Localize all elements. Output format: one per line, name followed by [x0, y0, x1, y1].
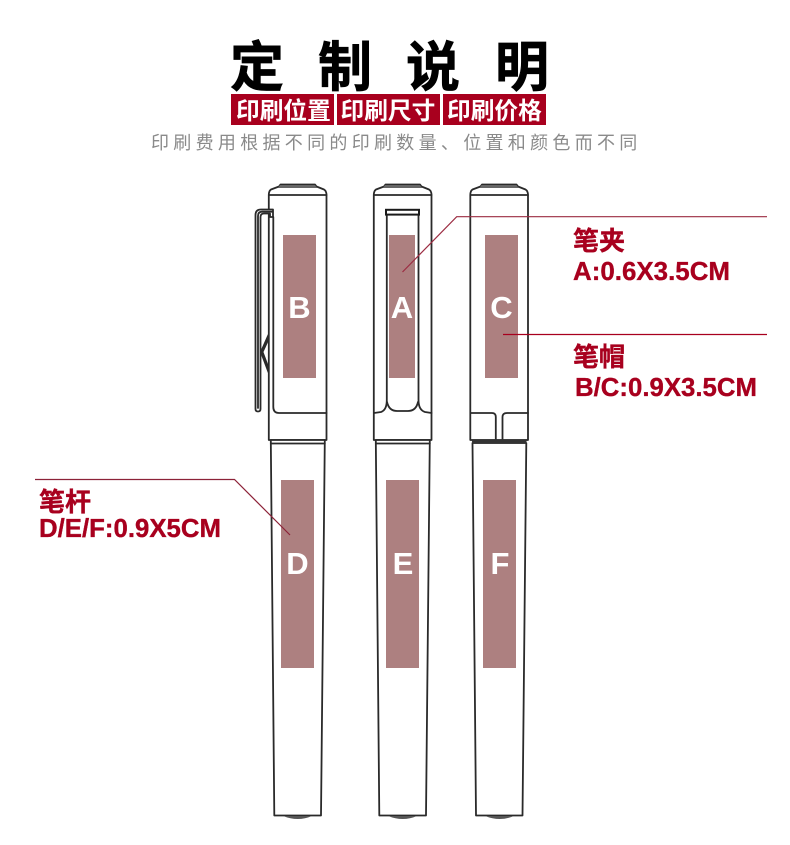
- barrel: [271, 440, 325, 816]
- label: clip: [573, 226, 730, 286]
- leader line: clip: [402, 217, 767, 272]
- barrel: [376, 440, 430, 816]
- leader line: barrel: [35, 480, 290, 535]
- title: 制: [318, 38, 372, 98]
- label: barrel: [39, 487, 221, 543]
- label: barrel: D/E/F:0.9X5CM: [39, 513, 221, 543]
- print area E: [386, 480, 419, 668]
- tag: print size: 印刷尺寸: [340, 98, 435, 125]
- letter F: F: [491, 546, 509, 581]
- pen left: with clip side view: [256, 184, 326, 819]
- label: cap: B/C:0.9X3.5CM: [575, 372, 757, 402]
- cap: [269, 184, 326, 440]
- label: cap: 笔帽: [573, 342, 625, 372]
- print area C: [485, 235, 518, 378]
- print area B: [283, 235, 316, 378]
- label: clip: A:0.6X3.5CM: [573, 256, 730, 286]
- barrel end: [388, 816, 417, 819]
- tag: print price: 印刷价格: [447, 98, 542, 125]
- print area D: [281, 480, 314, 668]
- barrel end: [485, 816, 514, 819]
- letter A: A: [391, 290, 413, 325]
- title: 明: [495, 38, 549, 98]
- print area A: [389, 235, 415, 378]
- title: 定: [230, 38, 284, 98]
- cap: [470, 184, 528, 440]
- title: [230, 38, 549, 98]
- letter C: C: [490, 290, 513, 325]
- clip: [374, 215, 387, 413]
- label: clip: 笔夹: [573, 226, 625, 256]
- print area F: [483, 480, 516, 668]
- clip: [256, 210, 273, 412]
- subtitle: 印刷费用根据不同的印刷数量、位置和颜色而不同: [151, 133, 642, 153]
- label: cap: [573, 342, 757, 402]
- heading tags: [231, 94, 546, 125]
- title: 说: [406, 38, 460, 98]
- cap: [374, 184, 432, 440]
- letter D: D: [286, 546, 309, 581]
- leader line: cap: [503, 334, 767, 336]
- pen middle: clip front view: [374, 184, 432, 819]
- label: barrel: 笔杆: [39, 487, 91, 517]
- barrel end: [283, 816, 312, 819]
- barrel: [472, 443, 526, 816]
- letter B: B: [288, 290, 311, 325]
- letter E: E: [393, 546, 413, 581]
- pen right: back view: [470, 184, 528, 819]
- tag: print position: 印刷位置: [236, 97, 331, 125]
